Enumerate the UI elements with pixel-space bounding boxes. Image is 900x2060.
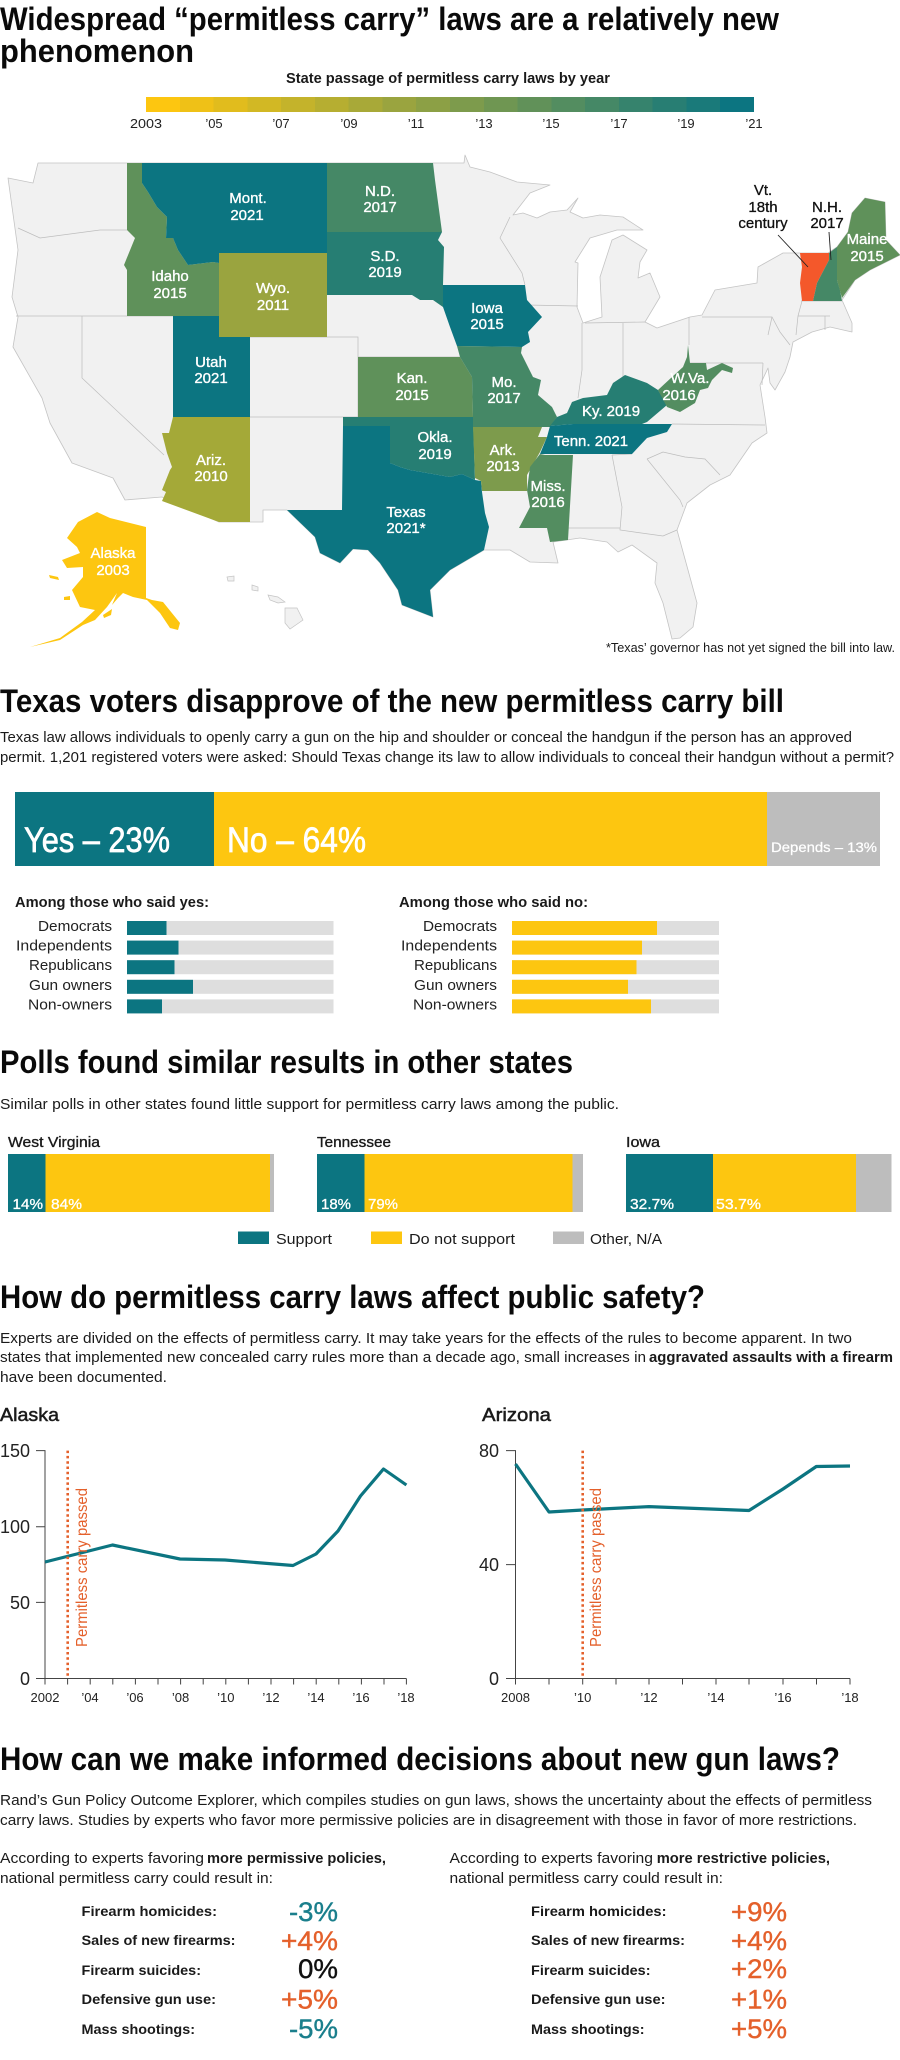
colour scale legend — [130, 71, 763, 131]
intro text: Texas law allows individuals to openly carry a gun on the hip and shoulder or conceal the handgun if the person has an approved — [0, 729, 852, 746]
panel: more restrictive: Firearm suicides: — [531, 1963, 650, 1978]
panel: more restrictive: national permitless carry could result in: — [450, 1870, 723, 1887]
chart: Alaska: Alaska — [0, 1405, 60, 1425]
panel: more restrictive: +1% — [731, 1984, 787, 2014]
leader lines for Vermont and New Hampshire — [778, 232, 831, 267]
section: public safety — [0, 1279, 893, 1705]
state: South Dakota — [327, 232, 444, 307]
breakdown: said yes — [15, 895, 334, 1013]
state labels: N.D. — [365, 183, 395, 200]
chart: Alaska: 50 — [10, 1593, 30, 1613]
chart: Arizona: ’14 — [707, 1690, 725, 1705]
state: Iowa — [443, 285, 542, 347]
legend year labels: ’05 — [205, 116, 223, 131]
breakdown: said no: Republicans — [414, 958, 497, 974]
main stacked bar: Yes – 23% — [24, 821, 170, 860]
state labels: W.Va. — [671, 370, 709, 387]
legend year labels: ’09 — [340, 116, 358, 131]
state: Texas — [287, 426, 489, 617]
chart: Alaska: Permitless carry passed — [74, 1488, 91, 1647]
section: Texas voters — [0, 683, 894, 1013]
panel: more permissive: 0% — [298, 1954, 338, 1984]
panel: more permissive — [0, 1850, 386, 2044]
chart: Arizona: ’16 — [774, 1690, 792, 1705]
state labels: Tenn. 2021 — [554, 433, 628, 450]
intro text: have been documented. — [0, 1369, 167, 1386]
panel: more permissive: According to experts favoring — [0, 1850, 204, 1867]
chart: Arizona: ’12 — [640, 1690, 658, 1705]
state: Arizona — [162, 417, 250, 522]
bar: Tennessee: 79% — [368, 1197, 398, 1213]
state labels: Ark. — [490, 442, 516, 459]
legend year labels: ’21 — [745, 116, 763, 131]
state: Oklahoma — [343, 417, 475, 480]
state labels: 2003 — [96, 562, 130, 579]
intro text — [0, 1792, 872, 1829]
intro text: aggravated assaults with a firearm — [649, 1349, 893, 1366]
intro text: Rand’s Gun Policy Outcome Explorer, which compiles studies on gun laws, shows the uncertainty about the effects of permitless — [0, 1792, 872, 1809]
title — [0, 1, 779, 69]
bar: Tennessee — [317, 1134, 583, 1213]
state: Tennessee — [540, 424, 672, 454]
state: New Hampshire — [813, 247, 842, 301]
base map of contiguous states — [8, 155, 900, 639]
bar: Iowa: 53.7% — [716, 1197, 761, 1213]
legend year labels: ’15 — [542, 116, 560, 131]
chart: Alaska: 100 — [0, 1517, 30, 1537]
intro text — [0, 729, 894, 766]
heading: How do permitless carry laws affect public safety? — [0, 1279, 705, 1315]
panel: more permissive: +4% — [281, 1926, 338, 1956]
panel: more restrictive: +4% — [731, 1926, 787, 1956]
state labels: Okla. — [417, 429, 453, 446]
breakdown: said no: Gun owners — [414, 978, 497, 994]
state labels: Alaska — [90, 545, 136, 562]
state: Arkansas — [473, 427, 547, 491]
state labels: Mont. — [229, 190, 267, 207]
state labels: Kan. — [397, 370, 427, 387]
footnote: *Texas’ governor has not yet signed the bill into law. — [606, 641, 895, 655]
state labels: Miss. — [530, 478, 566, 495]
state labels: 2019 — [418, 446, 452, 463]
breakdown: said yes: Republicans — [29, 958, 112, 974]
state labels: Ky. 2019 — [582, 403, 640, 420]
state: Missouri — [457, 346, 557, 427]
state labels: S.D. — [370, 248, 400, 265]
breakdown: said yes: Democrats — [38, 919, 112, 935]
legend: Do not support — [409, 1231, 516, 1248]
chart: Arizona: ’10 — [574, 1690, 591, 1705]
chart: Arizona: 2008 — [501, 1690, 530, 1705]
legend heading: State passage of permitless carry laws by year — [286, 71, 610, 87]
state labels: Texas — [386, 504, 426, 521]
panel: more restrictive — [450, 1850, 830, 2044]
state labels — [90, 182, 887, 579]
chart: Alaska: 2002 — [31, 1690, 59, 1705]
breakdown: said yes: Independents — [16, 939, 112, 955]
panel: more restrictive: According to experts favoring — [450, 1850, 653, 1867]
legend: Other, N/A — [590, 1231, 662, 1248]
chart: Alaska: ’14 — [307, 1690, 325, 1705]
bar: Iowa — [626, 1134, 892, 1213]
chart: Alaska: ’18 — [397, 1690, 415, 1705]
state: Kansas — [358, 357, 473, 417]
state: Utah — [173, 316, 250, 417]
state labels: 2019 — [368, 264, 402, 281]
chart: Arizona: 40 — [479, 1555, 499, 1575]
state labels: 2010 — [194, 468, 228, 485]
legend year labels: 2003 — [130, 116, 162, 131]
chart: Alaska: ’10 — [217, 1690, 234, 1705]
state labels: Vt. — [754, 182, 772, 199]
legend colour bar — [146, 97, 754, 112]
state labels: Iowa — [471, 300, 503, 317]
state labels: 2017 — [487, 390, 521, 407]
state labels: Idaho — [151, 268, 189, 285]
panel: more permissive: Mass shootings: — [82, 2022, 195, 2037]
bar: West Virginia: West Virginia — [8, 1134, 101, 1151]
Hawaii — [227, 576, 303, 629]
panel: more permissive: Defensive gun use: — [82, 1992, 216, 2007]
panel: more permissive: national permitless carry could result in: — [0, 1870, 273, 1887]
intro text: states that implemented new concealed carry rules more than a decade ago, small increases in — [0, 1349, 646, 1366]
state labels: 2015 — [153, 285, 187, 302]
state: Alaska — [30, 512, 180, 647]
state labels: 2011 — [257, 297, 289, 314]
state labels: Ariz. — [196, 452, 226, 469]
legend year labels: ’19 — [677, 116, 695, 131]
state: Kentucky — [550, 375, 667, 426]
chart: Alaska: ’12 — [262, 1690, 280, 1705]
legend year labels: ’13 — [475, 116, 493, 131]
intro text — [0, 1330, 893, 1386]
state: Maine — [837, 198, 900, 298]
panel: more permissive: more permissive policies, — [207, 1850, 386, 1867]
intro text: Similar polls in other states found little support for permitless carry laws among the public. — [0, 1096, 619, 1113]
bar: Tennessee: 18% — [321, 1197, 351, 1213]
heading: Texas voters disapprove of the new permitless carry bill — [0, 683, 784, 719]
breakdown: said no: Democrats — [423, 919, 497, 935]
state: Vermont — [800, 253, 829, 301]
panel: more restrictive: +5% — [731, 2014, 787, 2044]
heading: Polls found similar results in other states — [0, 1044, 573, 1080]
bar: West Virginia: 84% — [51, 1197, 82, 1213]
state labels: 2021 — [194, 370, 228, 387]
state labels: Utah — [195, 354, 227, 371]
breakdown: said no: Non-owners — [413, 997, 497, 1013]
panel: more permissive: Firearm homicides: — [82, 1904, 217, 1919]
state labels: 2021 — [230, 207, 264, 224]
state: Idaho — [124, 163, 219, 316]
chart: Arizona: ’18 — [841, 1690, 859, 1705]
chart: Arizona: Arizona — [482, 1405, 552, 1425]
intro text: permit. 1,201 registered voters were asked: Should Texas change its law to allow individuals to conceal their handgun without a permit? — [0, 749, 894, 766]
state labels: 2016 — [662, 387, 696, 404]
bar: Iowa: 32.7% — [630, 1197, 674, 1213]
chart: Alaska: 0 — [20, 1669, 30, 1689]
state: Wyoming — [219, 253, 327, 337]
chart: Alaska: 150 — [0, 1441, 30, 1461]
intro text: carry laws. Studies by experts who favor more permissive policies are in disagreement with those in favor of more restrictions. — [0, 1812, 857, 1829]
panel: more permissive: -3% — [289, 1897, 338, 1927]
panel: more restrictive: more restrictive policies, — [657, 1850, 830, 1867]
section: informed decisions — [0, 1741, 872, 2044]
bar: Tennessee: Tennessee — [317, 1134, 391, 1151]
legend: Support — [276, 1231, 333, 1248]
state labels: 2021* — [386, 520, 426, 537]
section: other states polls — [0, 1044, 892, 1248]
legend year labels: ’07 — [272, 116, 290, 131]
legend year labels — [130, 116, 763, 131]
main stacked bar: No – 64% — [227, 821, 366, 860]
state: North Dakota — [327, 163, 442, 232]
state labels: 2015 — [395, 387, 429, 404]
state: West Virginia — [658, 345, 733, 412]
breakdown: said no: Independents — [401, 939, 497, 955]
panel: more permissive: Firearm suicides: — [82, 1963, 201, 1978]
state: Montana — [142, 163, 327, 265]
breakdown: said yes: Among those who said yes: — [15, 895, 209, 911]
chart: Arizona — [479, 1405, 859, 1705]
chart: Alaska: ’16 — [352, 1690, 370, 1705]
legend year labels: ’17 — [610, 116, 628, 131]
chart: Arizona: Permitless carry passed — [588, 1488, 605, 1647]
chart: Alaska: ’04 — [81, 1690, 99, 1705]
chart: Alaska: ’08 — [172, 1690, 189, 1705]
legend — [238, 1231, 662, 1248]
state labels: 2017 — [810, 215, 844, 232]
bar: Iowa: Iowa — [626, 1134, 661, 1151]
state labels: 2013 — [486, 458, 520, 475]
panel: more restrictive: Sales of new firearms: — [531, 1933, 685, 1948]
chart: Arizona: 0 — [489, 1669, 499, 1689]
intro text: Experts are divided on the effects of permitless carry. It may take years for the effects of the rules to become apparent. In two — [0, 1330, 852, 1347]
state border lines — [16, 217, 842, 536]
panel: more restrictive: Defensive gun use: — [531, 1992, 666, 2007]
title: phenomenon — [0, 33, 194, 69]
bar: West Virginia — [8, 1134, 274, 1213]
state: Mississippi — [519, 454, 573, 542]
breakdown: said yes: Non-owners — [28, 997, 112, 1013]
state labels: 18th — [748, 199, 778, 216]
chart: Alaska: ’06 — [126, 1690, 144, 1705]
panel: more permissive: +5% — [281, 1984, 338, 2014]
state labels: century — [738, 215, 788, 232]
breakdown: said yes: Gun owners — [29, 978, 112, 994]
heading: How can we make informed decisions about new gun laws? — [0, 1741, 840, 1777]
state labels: Wyo. — [256, 280, 290, 297]
state labels: 2016 — [531, 494, 565, 511]
panel: more restrictive: Mass shootings: — [531, 2022, 644, 2037]
legend year labels: ’11 — [408, 116, 424, 131]
state labels: 2017 — [363, 199, 397, 216]
breakdown: said no: Among those who said no: — [399, 895, 588, 911]
state labels: 2015 — [850, 248, 884, 265]
main stacked bar: Depends – 13% — [771, 839, 877, 855]
panel: more restrictive: Firearm homicides: — [531, 1904, 666, 1919]
state labels: 2015 — [470, 316, 504, 333]
panel: more permissive: Sales of new firearms: — [82, 1933, 236, 1948]
panel: more permissive: -5% — [289, 2014, 338, 2044]
chart: Arizona: 80 — [479, 1441, 499, 1461]
state labels: Mo. — [491, 374, 517, 391]
panel: more restrictive: +9% — [731, 1897, 787, 1927]
bar: West Virginia: 14% — [12, 1197, 43, 1213]
state labels: N.H. — [812, 199, 842, 216]
state labels: Maine — [847, 231, 887, 248]
breakdown: said no — [399, 895, 719, 1013]
panel: more restrictive: +2% — [731, 1954, 787, 1984]
main stacked bar — [15, 792, 880, 866]
title: Widespread “permitless carry” laws are a relatively new — [0, 1, 779, 37]
chart: Alaska — [0, 1405, 415, 1705]
US map — [8, 155, 900, 647]
